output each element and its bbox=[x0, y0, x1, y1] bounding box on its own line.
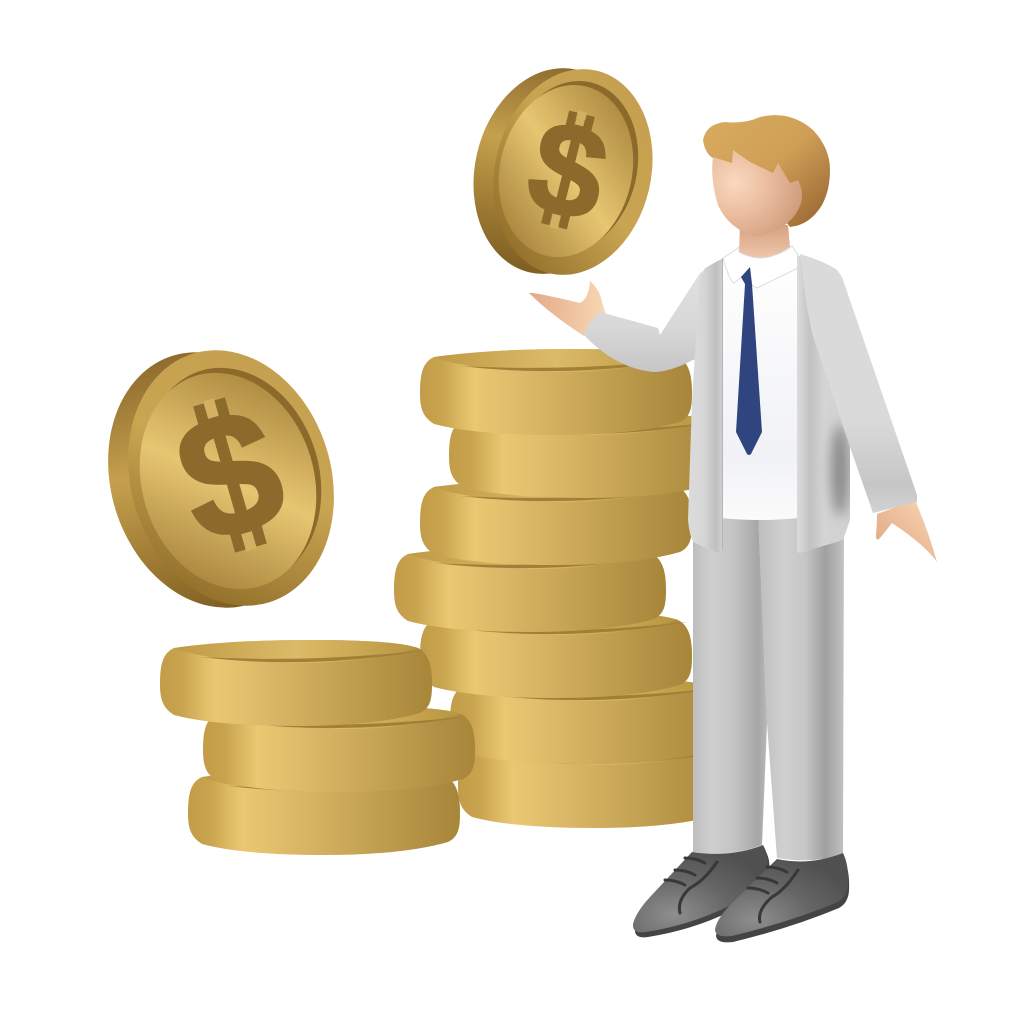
coin 5 bbox=[420, 612, 692, 698]
coin 1 bbox=[420, 349, 692, 435]
floating coin: left bbox=[77, 324, 365, 634]
coin 6 bbox=[450, 678, 722, 764]
illustration: businessman with coin stacks bbox=[108, 68, 937, 942]
right hand bbox=[876, 500, 937, 562]
coin 2 bbox=[203, 706, 475, 792]
left sleeve bbox=[584, 258, 725, 372]
coin 3 bbox=[420, 479, 692, 565]
right trouser leg bbox=[758, 510, 844, 860]
coin stack: right bbox=[394, 349, 730, 828]
necktie bbox=[736, 267, 762, 455]
face bbox=[712, 150, 802, 237]
hair bbox=[703, 115, 830, 227]
right jacket panel bbox=[797, 255, 850, 553]
left jacket panel bbox=[688, 258, 723, 553]
coin stack: left bbox=[160, 640, 475, 855]
businessman bbox=[529, 115, 937, 942]
coin 4 bbox=[394, 546, 666, 632]
left hand bbox=[529, 281, 606, 336]
shirt bbox=[720, 255, 798, 520]
coin 1 bbox=[160, 640, 432, 726]
floating coin: top bbox=[454, 52, 672, 291]
right sleeve bbox=[800, 254, 917, 513]
coin 2 bbox=[449, 412, 721, 498]
dollar sign: $ bbox=[158, 370, 302, 580]
coin 7 bbox=[458, 742, 730, 828]
collar bbox=[723, 246, 800, 288]
neck bbox=[739, 225, 790, 258]
left trouser leg bbox=[693, 510, 767, 854]
left shoe bbox=[633, 845, 770, 937]
dollar sign: $ bbox=[515, 90, 621, 250]
coin 3 bbox=[188, 769, 460, 855]
right shoe bbox=[715, 853, 849, 942]
